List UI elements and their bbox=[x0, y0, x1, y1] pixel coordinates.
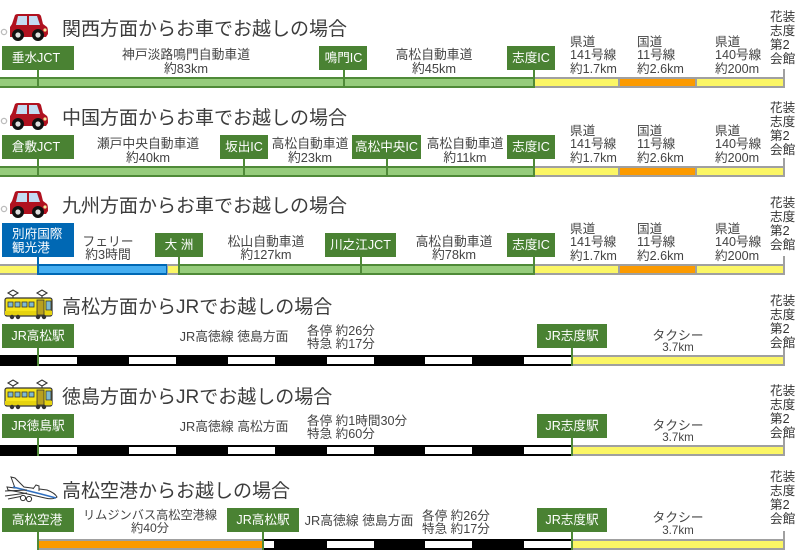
heading: Chugoku: 中国方面からお車でお越しの場合 bbox=[62, 107, 347, 129]
label: travel times: 各停 約1時間30分 bbox=[307, 413, 407, 428]
label: Takamatsu expressway: 約45km bbox=[412, 61, 456, 76]
panel: route from Takamatsu Airport bbox=[2, 469, 796, 550]
label: destination hall: 会館 bbox=[770, 143, 795, 157]
panel: route from Takamatsu by JR bbox=[0, 290, 796, 366]
stop: Takamatsu Airport bbox=[2, 508, 74, 532]
stop: JR Tokushima station: JR徳島駅 bbox=[11, 419, 65, 433]
stop: Shido IC bbox=[507, 233, 555, 257]
label: destination hall: 志度 bbox=[770, 397, 796, 412]
label: destination hall: 第2 bbox=[770, 128, 790, 143]
label: destination hall: 会館 bbox=[770, 52, 795, 66]
label: prefectural road 141: 県道 bbox=[570, 124, 596, 138]
stop: Kawanoe JCT: 川之江JCT bbox=[330, 238, 391, 252]
heading: Kyushu: 九州方面からお車でお越しの場合 bbox=[62, 195, 347, 217]
stop: JR Takamatsu station: JR高松駅 bbox=[11, 328, 65, 343]
stop: Tarumi JCT: 垂水JCT bbox=[12, 51, 60, 65]
label: prefectural road 141 bbox=[570, 35, 617, 76]
label: national road 11 bbox=[637, 35, 684, 76]
label: prefectural road 140: 県道 bbox=[715, 124, 741, 138]
label: national road 11: 約2.6km bbox=[637, 151, 684, 165]
label: prefectural road 140: 140号線 bbox=[715, 234, 762, 249]
label: Takamatsu expressway bbox=[272, 136, 349, 165]
label: Takamatsu expressway: 約11km bbox=[443, 150, 487, 165]
label: Matsuyama expressway: 約127km bbox=[240, 247, 292, 262]
label: Kobe-Awaji-Naruto expressway: 神戸淡路鳴門自動車道 bbox=[122, 47, 250, 62]
label: Takamatsu expressway bbox=[396, 47, 473, 76]
label: prefectural road 140 bbox=[715, 222, 762, 263]
heading: Kansai: 関西方面からお車でお越しの場合 bbox=[62, 18, 347, 40]
label: Kobe-Awaji-Naruto expressway: 約83km bbox=[164, 61, 208, 76]
stop: JR Tokushima station bbox=[2, 414, 74, 438]
label: destination hall: 第2 bbox=[770, 497, 790, 512]
label: Takamatsu expressway: 高松自動車道 bbox=[396, 47, 473, 62]
label: taxi bbox=[652, 328, 704, 354]
label: prefectural road 141: 約1.7km bbox=[570, 151, 617, 165]
icon: car bbox=[1, 103, 48, 130]
label: prefectural road 141 bbox=[570, 124, 617, 165]
label: prefectural road 141 bbox=[570, 222, 617, 263]
panel: route from Kyushu by car bbox=[0, 191, 796, 275]
label: taxi: タクシー bbox=[652, 510, 704, 525]
label: destination hall: 花装 bbox=[770, 293, 796, 308]
label: Takamatsu expressway: 高松自動車道 bbox=[272, 136, 349, 151]
label: destination hall bbox=[770, 9, 796, 66]
label: Takamatsu expressway: 高松自動車道 bbox=[416, 234, 493, 249]
route bar bbox=[0, 69, 785, 88]
stop: Kawanoe JCT bbox=[325, 233, 396, 257]
railway line bar bbox=[0, 437, 785, 456]
label: taxi: 3.7km bbox=[662, 431, 694, 444]
label: limousine bus: 約40分 bbox=[131, 520, 169, 535]
stop: Naruto IC bbox=[319, 46, 367, 70]
label: national road 11: 国道 bbox=[637, 124, 663, 138]
label: JR Kotoku line: JR高徳線 高松方面 bbox=[180, 419, 289, 434]
label: national road 11: 約2.6km bbox=[637, 62, 684, 76]
label: Seto-Chuo expressway: 瀬戸中央自動車道 bbox=[97, 136, 199, 151]
stop: Tarumi JCT bbox=[2, 46, 74, 70]
stop: JR Takamatsu station bbox=[227, 508, 299, 532]
label: national road 11: 11号線 bbox=[637, 234, 676, 249]
label: national road 11: 11号線 bbox=[637, 47, 676, 62]
label: Seto-Chuo expressway bbox=[97, 136, 199, 165]
icon: airplane bbox=[5, 477, 57, 502]
label: destination hall: 第2 bbox=[770, 223, 790, 238]
label: prefectural road 140: 約200m bbox=[715, 151, 759, 165]
label: Takamatsu expressway bbox=[427, 136, 504, 165]
label: ferry: フェリー bbox=[82, 234, 134, 249]
label: travel times: 各停 約26分 bbox=[307, 323, 375, 338]
label: prefectural road 140: 140号線 bbox=[715, 136, 762, 151]
label: travel times bbox=[307, 413, 407, 441]
heading: Takamatsu Airport: 高松空港からお越しの場合 bbox=[62, 480, 290, 502]
heading: Takamatsu JR: 高松方面からJRでお越しの場合 bbox=[62, 296, 332, 318]
label: travel times: 特急 約17分 bbox=[422, 522, 490, 536]
stop: JR Shido station bbox=[537, 508, 607, 532]
label: limousine bus bbox=[83, 507, 217, 535]
label: destination hall bbox=[770, 383, 796, 440]
stop: JR Shido station: JR志度駅 bbox=[545, 328, 599, 343]
stop: JR Takamatsu station: JR高松駅 bbox=[236, 512, 290, 527]
label: Matsuyama expressway: 松山自動車道 bbox=[228, 234, 305, 249]
label: prefectural road 141: 約1.7km bbox=[570, 249, 617, 263]
stop: JR Shido station: JR志度駅 bbox=[545, 512, 599, 527]
stop: Ozu: 大 洲 bbox=[165, 238, 193, 252]
stop: Shido IC bbox=[507, 46, 555, 70]
label: destination hall: 花装 bbox=[770, 100, 796, 115]
label: destination hall: 志度 bbox=[770, 23, 796, 38]
panel: route from Chugoku by car bbox=[0, 100, 796, 177]
stop: Takamatsu Airport: 高松空港 bbox=[12, 512, 63, 527]
stop: JR Shido station: JR志度駅 bbox=[545, 418, 599, 433]
label: limousine bus: リムジンバス高松空港線 bbox=[83, 507, 217, 522]
stop: JR Shido station bbox=[537, 414, 607, 438]
label: ferry: 約3時間 bbox=[85, 247, 131, 262]
stop: Sakaide IC: 坂出IC bbox=[225, 140, 263, 154]
label: prefectural road 140 bbox=[715, 35, 762, 76]
label: taxi bbox=[652, 510, 704, 537]
stop: Beppu International Port: 観光港 bbox=[12, 241, 50, 255]
label: destination hall: 花装 bbox=[770, 9, 796, 24]
label: prefectural road 141: 141号線 bbox=[570, 234, 617, 249]
label: taxi: 3.7km bbox=[662, 524, 694, 537]
label: prefectural road 141: 約1.7km bbox=[570, 62, 617, 76]
label: prefectural road 141: 県道 bbox=[570, 35, 596, 49]
label: taxi: タクシー bbox=[652, 328, 704, 343]
stop: Kurashiki JCT: 倉敷JCT bbox=[12, 139, 60, 154]
stop: Beppu International Port: 別府国際 bbox=[12, 227, 63, 241]
label: destination hall: 会館 bbox=[770, 426, 795, 440]
route bar bbox=[0, 158, 785, 177]
label: national road 11: 11号線 bbox=[637, 136, 676, 151]
stop: Shido IC: 志度IC bbox=[512, 139, 550, 154]
label: destination hall: 志度 bbox=[770, 114, 796, 129]
label: Takamatsu expressway: 約78km bbox=[432, 247, 476, 262]
icon: train bbox=[5, 290, 52, 319]
label: destination hall: 志度 bbox=[770, 209, 796, 224]
label: destination hall bbox=[770, 469, 796, 526]
label: destination hall: 会館 bbox=[770, 336, 795, 350]
stop: JR Takamatsu station bbox=[2, 324, 74, 348]
label: Matsuyama expressway bbox=[228, 234, 305, 262]
icon: car bbox=[1, 14, 48, 41]
label: national road 11 bbox=[637, 222, 684, 263]
label: prefectural road 141: 県道 bbox=[570, 222, 596, 236]
label: national road 11: 約2.6km bbox=[637, 249, 684, 263]
stop: Ozu bbox=[155, 233, 203, 257]
label: travel times bbox=[422, 508, 490, 536]
label: travel times: 特急 約17分 bbox=[307, 337, 375, 351]
stop: Shido IC bbox=[507, 135, 555, 159]
label: destination hall: 花装 bbox=[770, 383, 796, 398]
panel: route from Tokushima by JR bbox=[0, 380, 796, 456]
label: destination hall: 志度 bbox=[770, 307, 796, 322]
stop: Kurashiki JCT bbox=[2, 135, 74, 159]
label: destination hall: 会館 bbox=[770, 512, 795, 526]
bus and railway line bar bbox=[37, 531, 785, 550]
label: travel times: 特急 約60分 bbox=[307, 427, 375, 441]
label: Takamatsu expressway bbox=[416, 234, 493, 262]
stop: Shido IC: 志度IC bbox=[512, 50, 550, 65]
label: destination hall: 第2 bbox=[770, 321, 790, 336]
label: prefectural road 140: 約200m bbox=[715, 249, 759, 263]
stop: Shido IC: 志度IC bbox=[512, 237, 550, 252]
stop: Sakaide IC bbox=[220, 135, 268, 159]
label: taxi bbox=[652, 418, 704, 444]
label: destination hall: 会館 bbox=[770, 238, 795, 252]
label: destination hall: 志度 bbox=[770, 483, 796, 498]
label: travel times: 各停 約26分 bbox=[422, 508, 490, 523]
label: national road 11: 国道 bbox=[637, 222, 663, 236]
stop: Beppu International Port bbox=[2, 223, 74, 257]
stop: JR Shido station bbox=[537, 324, 607, 348]
label: national road 11: 国道 bbox=[637, 35, 663, 49]
panel: route from Kansai by car bbox=[0, 9, 796, 88]
label: destination hall bbox=[770, 195, 796, 252]
stop: Naruto IC: 鳴門IC bbox=[325, 51, 362, 65]
label: taxi: タクシー bbox=[652, 418, 704, 433]
label: ferry bbox=[82, 234, 134, 262]
label: Seto-Chuo expressway: 約40km bbox=[126, 150, 170, 165]
heading: Tokushima JR: 徳島方面からJRでお越しの場合 bbox=[62, 386, 332, 408]
label: national road 11 bbox=[637, 124, 684, 165]
label: prefectural road 140 bbox=[715, 124, 762, 165]
stop: Takamatsu Chuo IC: 高松中央IC bbox=[355, 139, 418, 154]
label: travel times bbox=[307, 323, 375, 351]
route bar bbox=[0, 256, 785, 275]
railway line bar bbox=[0, 347, 785, 366]
label: destination hall: 第2 bbox=[770, 411, 790, 426]
label: JR Kotoku line: JR高徳線 徳島方面 bbox=[305, 513, 414, 528]
label: prefectural road 141: 141号線 bbox=[570, 47, 617, 62]
stop: Takamatsu Chuo IC bbox=[352, 135, 421, 159]
label: taxi: 3.7km bbox=[662, 341, 694, 354]
label: Takamatsu expressway: 高松自動車道 bbox=[427, 136, 504, 151]
icon: car bbox=[1, 191, 48, 218]
label: prefectural road 140: 140号線 bbox=[715, 47, 762, 62]
label: destination hall: 第2 bbox=[770, 37, 790, 52]
label: prefectural road 141: 141号線 bbox=[570, 136, 617, 151]
label: destination hall bbox=[770, 100, 796, 157]
label: destination hall: 花装 bbox=[770, 195, 796, 210]
label: JR Kotoku line: JR高徳線 徳島方面 bbox=[180, 329, 289, 344]
label: destination hall bbox=[770, 293, 796, 350]
label: Kobe-Awaji-Naruto expressway bbox=[122, 47, 250, 76]
label: prefectural road 140: 約200m bbox=[715, 62, 759, 76]
label: prefectural road 140: 県道 bbox=[715, 35, 741, 49]
label: destination hall: 花装 bbox=[770, 469, 796, 484]
label: prefectural road 140: 県道 bbox=[715, 222, 741, 236]
icon: train bbox=[5, 380, 52, 409]
label: Takamatsu expressway: 約23km bbox=[288, 150, 332, 165]
